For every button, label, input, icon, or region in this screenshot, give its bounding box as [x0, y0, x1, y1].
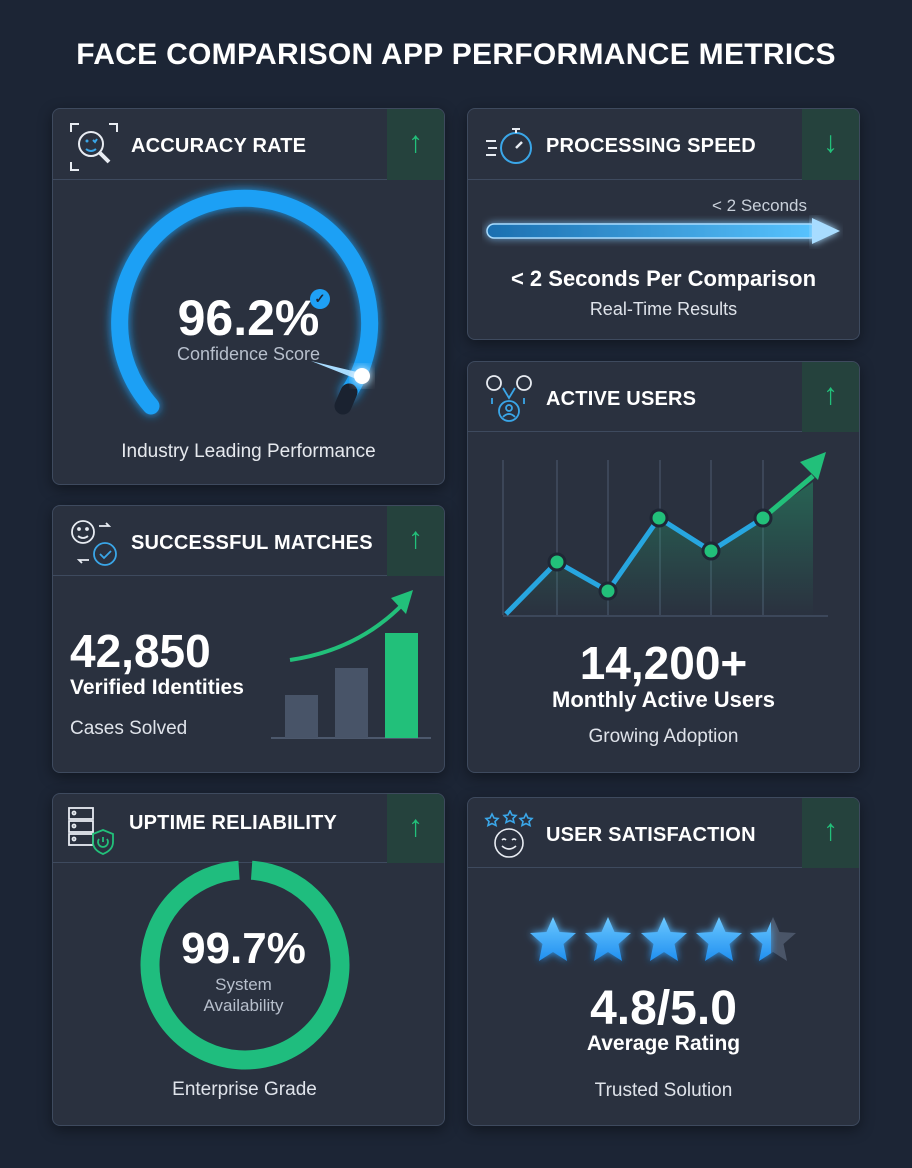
header: users: ACTIVE USERS: [546, 388, 696, 410]
arrow up: [387, 109, 444, 180]
arrow up: ↑: [408, 522, 423, 555]
panel: successful matches: Cases Solved: [70, 718, 187, 739]
panel: active users: Growing Adoption: [588, 726, 738, 747]
panel: accuracy rate: [52, 108, 445, 485]
panel: successful matches: Verified Identities: [70, 676, 244, 699]
gauge: [103, 182, 386, 422]
header: satisfaction: USER SATISFACTION: [546, 824, 756, 846]
bar chart: [271, 590, 431, 739]
ring gauge: [140, 860, 350, 1070]
panel: active users: [467, 361, 860, 773]
header: speed: [468, 109, 859, 180]
panel: uptime reliability: System: [215, 975, 272, 994]
header: accuracy: ACCURACY RATE: [131, 135, 306, 157]
panel: user satisfaction: 4.8/5.0: [590, 982, 737, 1035]
arrow up: [387, 794, 444, 863]
arrow down: ↓: [823, 126, 838, 159]
speed bar arrow: [482, 215, 843, 248]
panel: processing speed: Real-Time Results: [590, 299, 737, 319]
panel: accuracy rate: Confidence Score: [177, 344, 320, 364]
arrow down: [802, 109, 859, 180]
panel: successful matches: [52, 505, 445, 773]
title: FACE COMPARISON APP PERFORMANCE METRICS: [76, 38, 836, 71]
panel: user satisfaction: [467, 797, 860, 1126]
header: uptime: [53, 794, 444, 863]
panel: uptime reliability: [52, 793, 445, 1126]
header: uptime: UPTIME RELIABILITY: [129, 812, 337, 834]
panel: accuracy rate: Industry Leading Performance: [121, 441, 376, 462]
arrow up: [802, 362, 859, 432]
arrow up: ↑: [408, 810, 423, 843]
arrow up: ↑: [823, 814, 838, 847]
icon: verified badge: ✓: [315, 291, 325, 306]
icon: face scan: [70, 123, 118, 171]
arrow up: ↑: [823, 378, 838, 411]
panel: user satisfaction: Average Rating: [587, 1032, 740, 1055]
header: satisfaction: [468, 798, 859, 868]
panel: processing speed: < 2 Seconds Per Comparison: [511, 266, 816, 291]
arrow up: [387, 506, 444, 576]
icon: smiley with stars: [484, 810, 534, 858]
panel: successful matches: 42,850: [70, 625, 211, 677]
value 96.2%: 96.2%: [178, 290, 319, 346]
panel: user satisfaction: Trusted Solution: [595, 1080, 732, 1101]
header: users: [468, 362, 859, 432]
header: accuracy: [53, 109, 444, 180]
panel: uptime reliability: 99.7%: [181, 924, 306, 973]
arrow up: ↑: [408, 126, 423, 159]
panel: uptime reliability: Availability: [203, 996, 284, 1015]
arrow up: [802, 798, 859, 868]
panel: uptime reliability: Enterprise Grade: [172, 1079, 317, 1100]
panel: active users: Monthly Active Users: [552, 687, 775, 712]
star rating: [527, 914, 796, 964]
icon: face match: [71, 520, 117, 566]
header: matches: SUCCESSFUL MATCHES: [131, 532, 373, 554]
icon: stopwatch: [486, 128, 532, 164]
header: matches: [53, 506, 444, 576]
panel: processing speed: [467, 108, 860, 340]
line chart: [502, 452, 828, 617]
header: speed: PROCESSING SPEED: [546, 135, 756, 157]
panel: active users: 14,200+: [580, 637, 747, 689]
panel: processing speed: < 2 Seconds: [712, 196, 807, 215]
icon: server shield: [68, 807, 114, 855]
icon: users network: [486, 375, 532, 422]
icon: verified badge: [310, 289, 330, 309]
